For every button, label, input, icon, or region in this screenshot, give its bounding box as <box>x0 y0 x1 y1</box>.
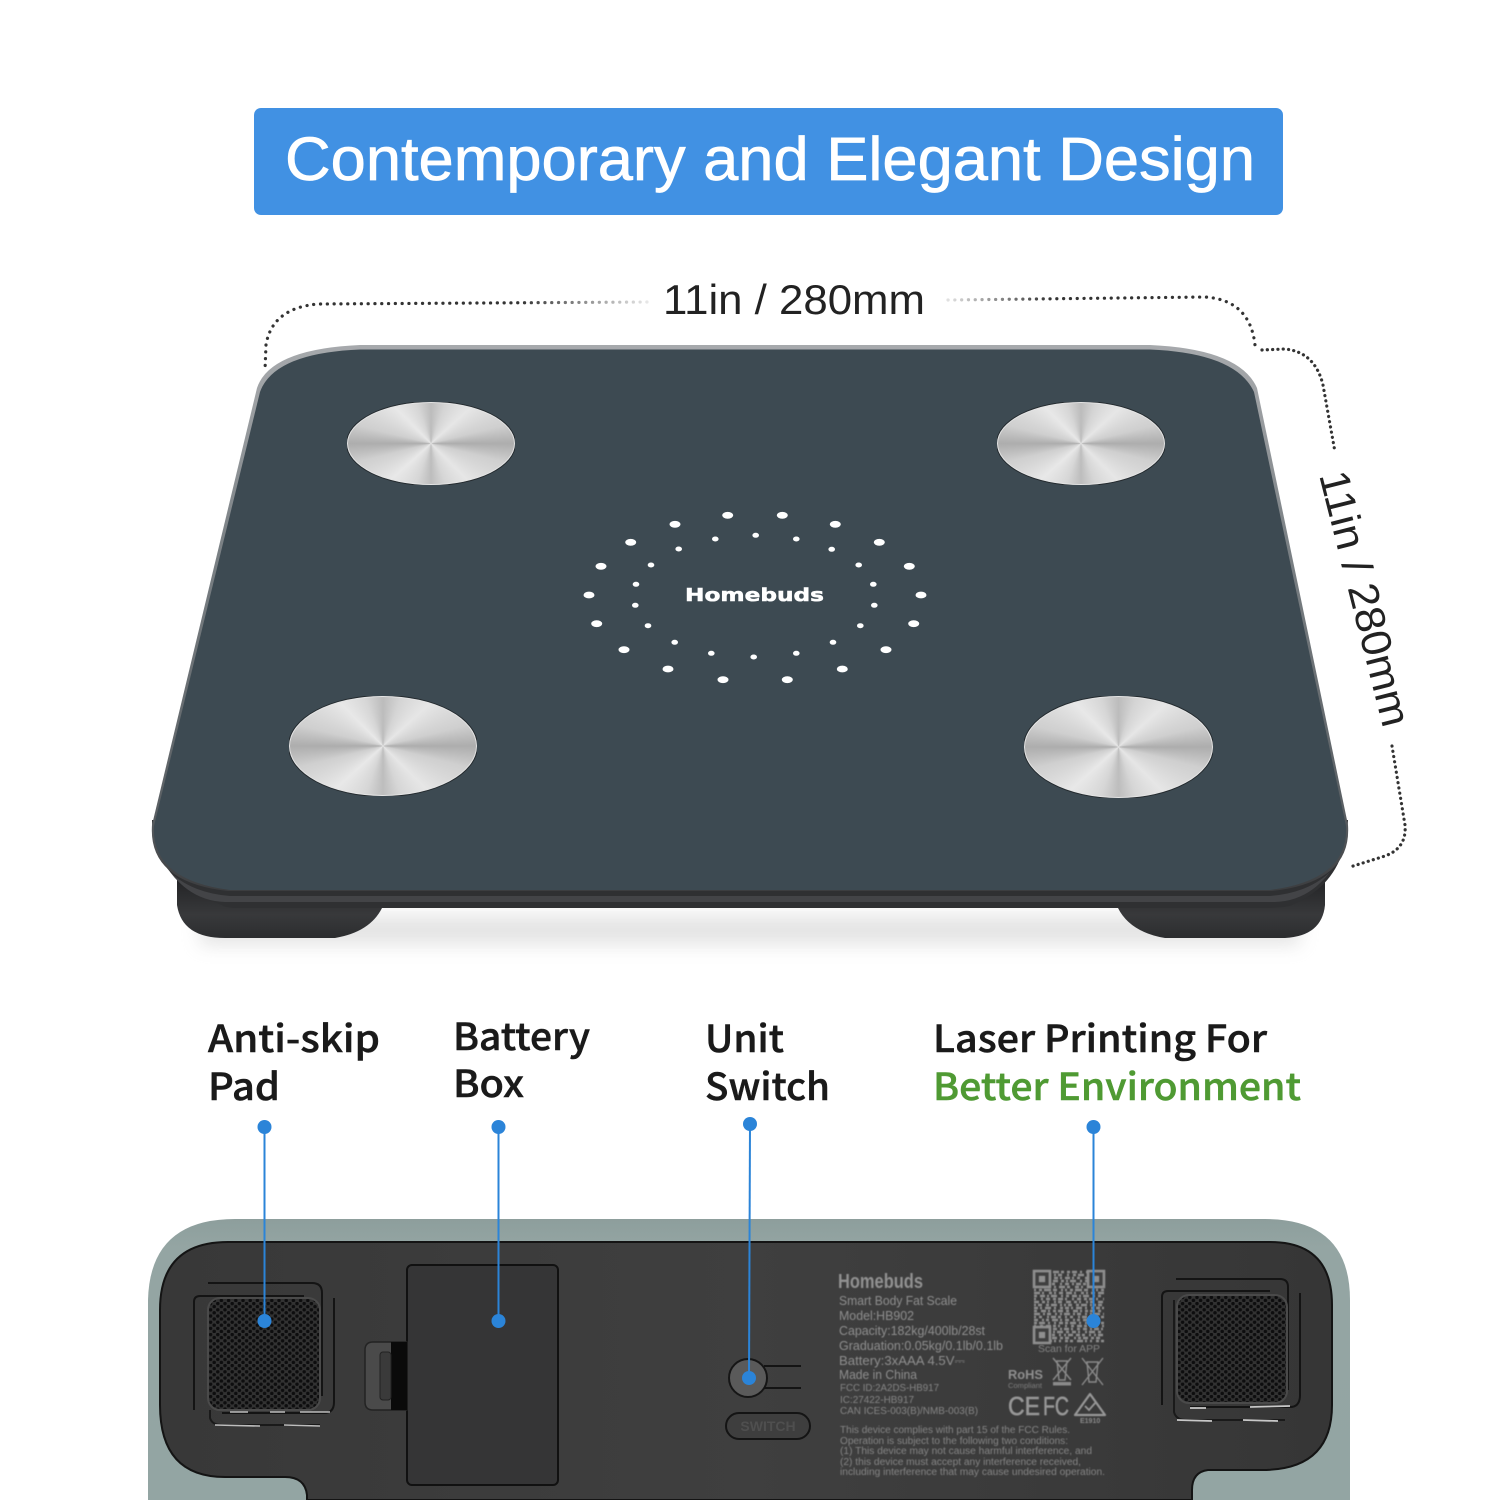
certification marks <box>1008 1344 1105 1425</box>
width dimension: 11in / 280mm <box>265 276 1255 370</box>
label: Battery Box <box>453 1007 590 1108</box>
body edge <box>152 820 1348 908</box>
label: Laser Printing For Better Environment: Better Environment <box>933 1057 1301 1111</box>
right anti-skip pad <box>1162 1279 1300 1421</box>
certification marks: Scan for APP <box>1038 1344 1100 1355</box>
callout: laser printing pointer <box>1086 1120 1100 1328</box>
metal electrode: bottom left <box>289 696 477 796</box>
unit switch: SWITCH <box>740 1418 796 1434</box>
printed product information: Capacity:182kg/400lb/28st <box>839 1324 986 1338</box>
certification marks: Compliant <box>1008 1383 1042 1390</box>
scale, underside view <box>148 1219 1350 1500</box>
printed product information: Graduation:0.05kg/0.1lb/0.1lb <box>839 1339 1003 1353</box>
display dot ring <box>584 512 926 683</box>
printed product information: FCC ID:2A2DS-HB917 <box>840 1383 939 1394</box>
label: Unit Switch <box>705 1009 830 1111</box>
certification marks: FC <box>1043 1391 1069 1421</box>
label: Laser Printing For Better Environment: Laser Printing For <box>933 1009 1268 1063</box>
certification marks: CE <box>1008 1391 1040 1421</box>
printed product information: (1) This device may not cause harmful interference, and <box>840 1446 1092 1457</box>
printed product information: This device complies with part 15 of the FCC Rules. <box>840 1425 1070 1436</box>
outer shell <box>148 1219 1350 1500</box>
depth dimension: 11in / 280mm <box>1262 349 1420 867</box>
battery box cover <box>365 1265 558 1485</box>
printed product information: Operation is subject to the following two conditions: <box>840 1436 1068 1447</box>
label: Anti-skip Pad: Anti-skip <box>208 1009 380 1063</box>
callout: anti-skip pad pointer <box>258 1120 272 1328</box>
printed product information: Homebuds <box>838 1271 923 1293</box>
printed product information: Battery:3xAAA 4.5V⎓ <box>839 1354 965 1368</box>
printed product information <box>838 1271 1105 1478</box>
label: Battery Box: Battery <box>453 1007 590 1061</box>
printed product information: (2) this device must accept any interference received, <box>840 1457 1081 1468</box>
metal electrode: top left <box>347 402 515 485</box>
callout: unit switch pointer <box>742 1117 757 1385</box>
label: Unit Switch: Switch <box>705 1057 830 1111</box>
floor shadow <box>200 915 1300 945</box>
metal electrode: bottom right <box>1024 696 1213 798</box>
certification marks: RoHS <box>1008 1368 1043 1382</box>
label: Battery Box: Box <box>453 1054 524 1108</box>
printed product information: Made in China <box>839 1368 917 1382</box>
label: Anti-skip Pad: Pad <box>208 1057 280 1111</box>
title banner <box>254 108 1283 215</box>
printed product information: CAN ICES-003(B)/NMB-003(B) <box>840 1406 978 1417</box>
printed product information: Model:HB902 <box>839 1309 914 1323</box>
printed product information: including interference that may cause undesired operation. <box>840 1467 1105 1478</box>
battery latch <box>365 1342 407 1410</box>
dark base plate <box>160 1242 1332 1500</box>
scale, top view <box>152 345 1348 945</box>
printed product information: Smart Body Fat Scale <box>839 1294 957 1308</box>
printed product information: IC:27422-HB917 <box>840 1395 914 1406</box>
metal electrode: top right <box>997 402 1165 485</box>
top surface <box>152 345 1348 891</box>
depth dimension: 11in / 280mm: 11in / 280mm <box>1310 466 1420 731</box>
left anti-skip pad <box>194 1283 334 1426</box>
label: Laser Printing For Better Environment <box>933 1009 1301 1111</box>
certification marks: E1910 <box>1080 1418 1100 1425</box>
unit switch <box>726 1359 810 1439</box>
title banner: Contemporary and Elegant Design <box>285 125 1255 193</box>
label: Unit Switch: Unit <box>705 1009 784 1063</box>
QR code <box>1034 1271 1104 1343</box>
feet <box>177 880 1325 938</box>
callout: battery box pointer <box>492 1120 506 1328</box>
label: Anti-skip Pad <box>208 1009 380 1111</box>
width dimension: 11in / 280mm: 11in / 280mm <box>663 276 925 323</box>
brand logo: Homebuds <box>685 585 824 606</box>
